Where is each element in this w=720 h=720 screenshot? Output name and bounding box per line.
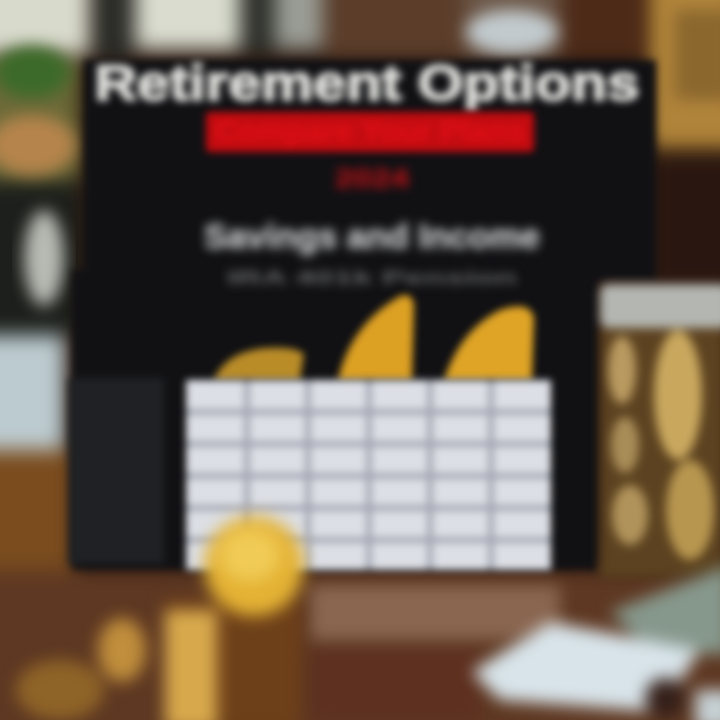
description text: IRA 401k Pension <box>227 268 517 288</box>
gold picture frame <box>655 0 720 140</box>
coin stack <box>165 600 300 720</box>
plant <box>0 46 76 175</box>
gold sphere <box>204 516 304 616</box>
jar of coins <box>600 284 720 578</box>
white object on shelf <box>466 10 558 54</box>
banknotes and papers <box>472 565 720 720</box>
vase <box>24 210 64 306</box>
gold shape middle <box>338 295 414 380</box>
red banner: Compare Your Plans <box>215 115 525 148</box>
blackboard <box>68 60 656 570</box>
gold shape right <box>444 306 534 380</box>
gold shape left <box>214 348 304 380</box>
description text <box>204 218 540 288</box>
red subheading: 2024 <box>335 163 410 193</box>
title: Retirement Options <box>94 55 640 111</box>
gold chart shapes <box>214 295 534 380</box>
gold coins <box>16 516 304 720</box>
white table grid <box>186 380 551 570</box>
description text: Savings and Income <box>204 218 540 256</box>
wooden table <box>310 585 560 720</box>
